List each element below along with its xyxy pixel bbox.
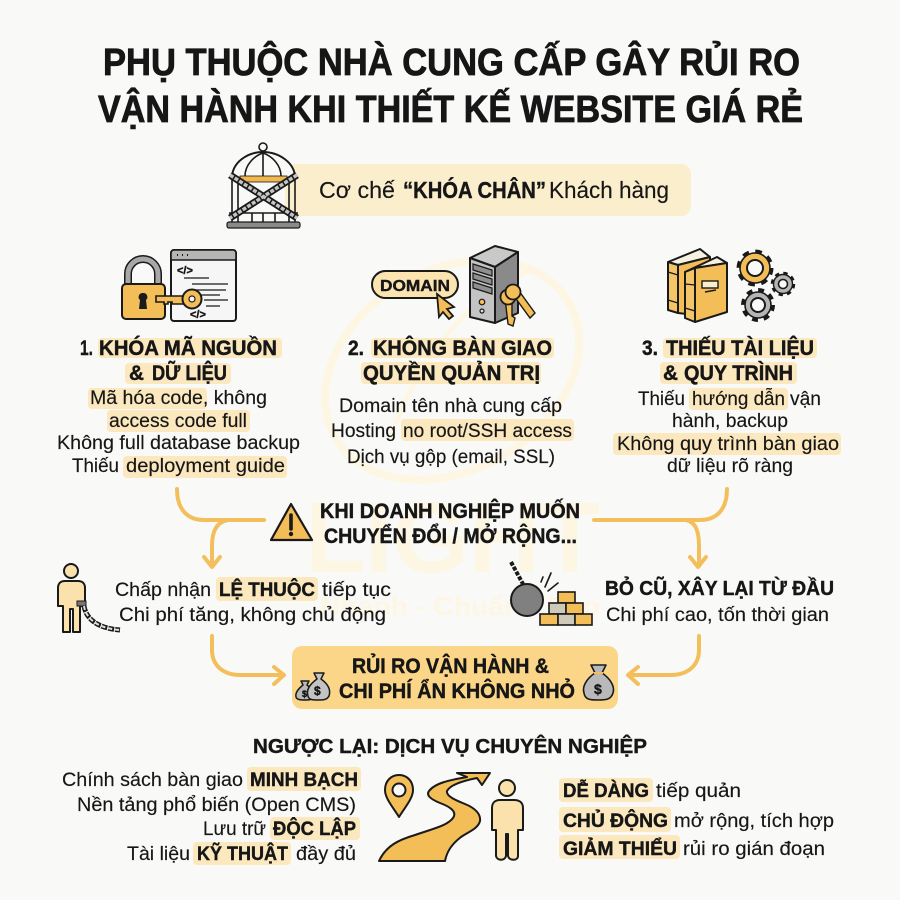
text: professional benefits left: đầy đủ: [296, 844, 356, 865]
text: professional benefits right: [559, 778, 834, 860]
icon: money bags left: $: [314, 684, 321, 698]
text: docs details: dữ liệu rõ ràng: [667, 456, 793, 477]
text: docs details: Thiếu: [638, 389, 685, 410]
banner: customer lock-in: “KHÓA CHÂN”: [403, 176, 546, 203]
heading: professional services: NGƯỢC LẠI: DỊCH VỤ CHUYÊN NGHIỆP: [253, 734, 647, 758]
text: professional benefits left: [62, 767, 361, 865]
callout: operating risk: RỦI RO VẬN HÀNH &: [352, 654, 549, 678]
panel: 3 missing docs: [613, 249, 841, 477]
text: source lock details: access code full: [109, 411, 247, 432]
text: professional benefits left: Tài liệu: [127, 844, 190, 865]
panel: 2 no admin handover: [331, 246, 574, 468]
heading: source lock: [80, 336, 282, 385]
text: when business wants to migrate: [320, 499, 580, 548]
icon: warning triangle: [271, 504, 312, 540]
heading: no admin handover: 2.: [348, 337, 364, 360]
icon: padlock, key and code window: </>: [177, 265, 193, 277]
heading: no admin handover: KHÔNG BÀN GIAO: [373, 336, 552, 360]
watermark logo: LIGHT: [305, 482, 600, 594]
banner: customer lock-in: Cơ chế: [319, 177, 395, 203]
text: professional benefits right: mở rộng, tích hợp: [674, 811, 834, 832]
text: accept dependency: Chấp nhận: [115, 580, 211, 601]
heading: missing docs: QUY TRÌNH: [684, 362, 793, 385]
text: professional benefits left: Nền tảng phổ biến (Open CMS): [77, 795, 356, 816]
icon: wrecking ball and bricks: [511, 562, 592, 625]
icon: money bag right: [583, 665, 614, 700]
watermark logo: [285, 216, 619, 621]
text: when business wants to migrate: CHUYỂN ĐỔI / MỞ RỘNG...: [324, 524, 577, 548]
text: professional benefits left: ĐỘC LẬP: [273, 818, 356, 840]
arrow: right branch to rebuild: [594, 489, 727, 567]
text: admin details: Hosting: [331, 421, 396, 442]
icon: padlock, key and code window: [122, 250, 236, 321]
arrow: dependency to risk: [212, 636, 284, 684]
icon: money bags left: $: [302, 689, 307, 699]
text: professional benefits left: Lưu trữ: [203, 819, 266, 840]
title: PHỤ THUỘC NHÀ CUNG CẤP GÂY RỦI RO: [103, 39, 800, 84]
icon: money bag right: $: [594, 681, 602, 697]
watermark logo: Nhanh - Chuẩn - Đẹp: [320, 591, 600, 621]
text: when business wants to migrate: KHI DOANH NGHIỆP MUỐN: [320, 499, 580, 523]
text: accept dependency: [115, 577, 391, 626]
text: professional benefits left: MINH BẠCH: [250, 770, 358, 791]
callout: operating risk: [292, 646, 618, 709]
text: rebuild from scratch: Chi phí cao, tốn thời gian: [606, 605, 829, 626]
icon: domain pill and server with keys: DOMAIN: [380, 278, 450, 295]
text: admin details: [331, 396, 574, 468]
text: accept dependency: Chi phí tăng, không chủ động: [119, 605, 386, 626]
arrow: left branch to dependency: [177, 489, 264, 567]
text: source lock details: Không full database backup: [57, 433, 300, 454]
icon: money bags left: [296, 673, 330, 700]
text: docs details: hành, backup: [672, 411, 788, 432]
heading: missing docs: [642, 336, 817, 385]
heading: source lock: KHÓA MÃ NGUỒN: [99, 336, 277, 360]
icon: padlock, key and code window: </>: [190, 309, 206, 321]
heading: no admin handover: [348, 336, 554, 385]
arrow: rebuild to risk: [628, 636, 699, 684]
text: docs details: Không quy trình bàn giao: [617, 434, 839, 455]
text: source lock details: deployment guide: [126, 456, 285, 477]
text: source lock details: Thiếu: [72, 456, 119, 477]
banner: customer lock-in: Khách hàng: [549, 177, 669, 203]
text: docs details: hướng dẫn: [692, 388, 785, 410]
text: rebuild from scratch: [605, 576, 834, 626]
text: accept dependency: LỆ THUỘC: [219, 579, 315, 601]
heading: no admin handover: QUYỀN QUẢN TRỊ: [363, 362, 540, 385]
text: professional benefits right: rủi ro gián đoạn: [683, 839, 825, 860]
text: docs details: [613, 388, 841, 477]
text: professional benefits left: KỸ THUẬT: [197, 843, 288, 865]
callout: operating risk: CHI PHÍ ẨN KHÔNG NHỎ: [339, 679, 575, 703]
icon: chained person: [58, 564, 120, 632]
text: admin details: Domain tên nhà cung cấp: [339, 396, 562, 417]
text: docs details: vận: [790, 389, 821, 410]
text: professional benefits right: CHỦ ĐỘNG: [563, 810, 668, 832]
icon: books and gears: [668, 249, 793, 322]
icon: domain pill and server with keys: [372, 246, 535, 326]
text: admin details: no root/SSH access: [403, 421, 572, 442]
heading: missing docs: &: [663, 362, 678, 385]
heading: source lock: DỮ LIỆU: [152, 361, 227, 385]
title: VẬN HÀNH KHI THIẾT KẾ WEBSITE GIÁ RẺ: [98, 87, 803, 131]
heading: missing docs: THIẾU TÀI LIỆU: [666, 336, 814, 360]
text: rebuild from scratch: BỎ CŨ, XÂY LẠI TỪ ĐẦU: [605, 576, 834, 600]
heading: missing docs: 3.: [642, 337, 658, 360]
text: admin details: Dịch vụ gộp (email, SSL): [347, 447, 555, 468]
text: accept dependency: tiếp tục: [322, 580, 391, 601]
text: professional benefits right: GIẢM THIỂU: [563, 838, 677, 860]
icon: person: [492, 780, 523, 860]
panel: 1 source lock: [57, 250, 300, 478]
icon: location pin: [385, 775, 413, 817]
icon: chained cage: [227, 143, 300, 228]
heading: source lock: &: [129, 362, 144, 385]
text: source lock details: Mã hóa code, không: [90, 388, 267, 409]
text: source lock details: [57, 388, 300, 478]
title: [98, 39, 803, 131]
text: professional benefits right: tiếp quản: [656, 781, 741, 802]
heading: source lock: 1.: [80, 337, 93, 360]
icon: winding road arrow: [379, 773, 490, 861]
banner: customer lock-in: [285, 164, 691, 216]
text: professional benefits right: DỄ DÀNG: [563, 780, 649, 802]
text: professional benefits left: Chính sách bàn giao: [62, 770, 243, 791]
